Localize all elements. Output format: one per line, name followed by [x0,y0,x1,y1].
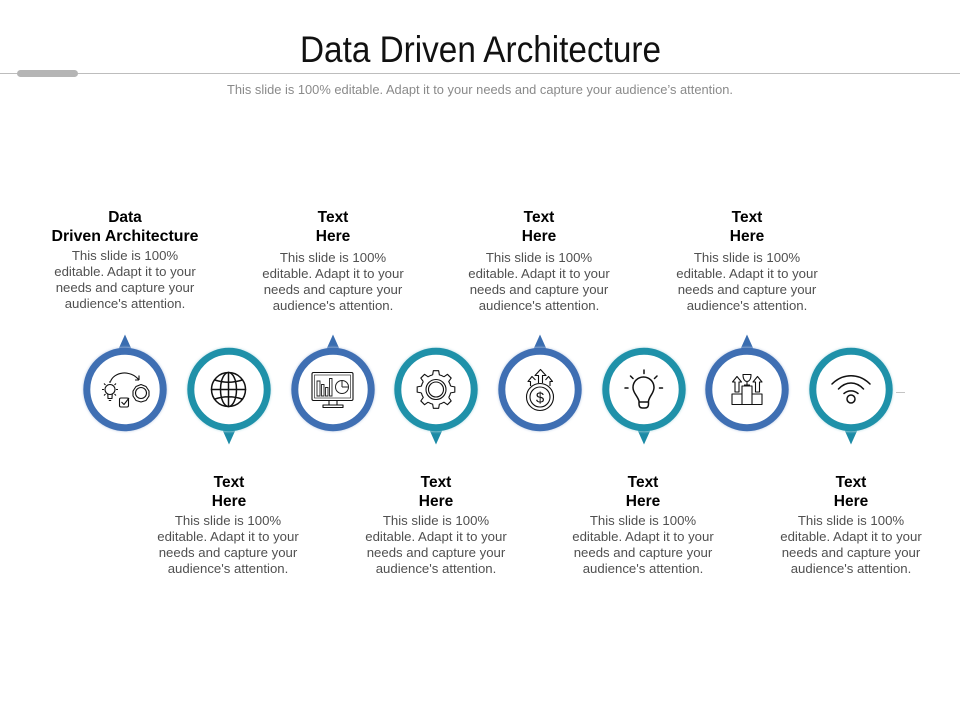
text block 2: needs and capture your [159,545,298,560]
text block 8: editable. Adapt it to your [780,529,922,544]
node 1: blue ring [83,334,167,432]
text block 3: Text [318,209,348,226]
text block 2: Text [214,474,244,491]
text block 3 [262,209,404,313]
icon: light bulb [625,370,662,408]
icon: wifi [832,376,870,403]
text block 7 [676,209,818,313]
text block 1: Data [108,209,142,226]
text block 1: needs and capture your [56,280,195,295]
text block 5: audience's attention. [479,298,599,313]
text block 5: Here [522,228,557,245]
icon: gear [417,371,455,408]
icon: globe [212,372,246,406]
text block 1: editable. Adapt it to your [54,264,196,279]
text block 3: editable. Adapt it to your [262,266,404,281]
text block 4: Here [419,493,454,510]
text block 8: needs and capture your [782,545,921,560]
text block 5: needs and capture your [470,282,609,297]
title: Data Driven Architecture [300,29,661,70]
text block 3: Here [316,228,351,245]
text block 6: needs and capture your [574,545,713,560]
text block 5 [468,209,610,313]
text block 4: This slide is 100% [383,513,489,528]
node 5: blue ring [498,334,582,432]
text block 2: This slide is 100% [175,513,281,528]
text block 4: needs and capture your [367,545,506,560]
text block 2 [157,474,299,576]
text block 6: editable. Adapt it to your [572,529,714,544]
node 7: blue ring [705,334,789,432]
text block 6: This slide is 100% [590,513,696,528]
node 8: teal ring [809,348,893,444]
text block 8: Here [834,493,869,510]
text block 4: editable. Adapt it to your [365,529,507,544]
text block 7: This slide is 100% [694,250,800,265]
text block 1: This slide is 100% [72,248,178,263]
text block 3: This slide is 100% [280,250,386,265]
node 3: blue ring [291,334,375,432]
header rule [0,70,960,77]
text block 5: editable. Adapt it to your [468,266,610,281]
text block 7: needs and capture your [678,282,817,297]
text block 3: needs and capture your [264,282,403,297]
text block 5: Text [524,209,554,226]
node 2: teal ring [187,348,271,444]
text block 5: This slide is 100% [486,250,592,265]
text block 7: Text [732,209,762,226]
text block 1 [52,209,199,311]
text block 4: Text [421,474,451,491]
text block 2: editable. Adapt it to your [157,529,299,544]
text block 1: Driven Architecture [52,228,199,245]
icon: monitor with charts [312,372,353,408]
text block 4 [365,474,507,576]
node 4: teal ring [394,348,478,444]
icon: podium with trophy [732,374,762,404]
text block 1: audience's attention. [65,296,185,311]
text block 6: Here [626,493,661,510]
text block 6 [572,474,714,576]
text block 3: audience's attention. [273,298,393,313]
text block 8: This slide is 100% [798,513,904,528]
text block 7: audience's attention. [687,298,807,313]
text block 2: audience's attention. [168,561,288,576]
node 6: teal ring [602,348,686,444]
text block 7: Here [730,228,765,245]
text block 8: audience's attention. [791,561,911,576]
text block 6: Text [628,474,658,491]
text block 6: audience's attention. [583,561,703,576]
text block 2: Here [212,493,247,510]
icon: idea to gear process [102,373,149,407]
text block 8 [780,474,922,576]
text block 8: Text [836,474,866,491]
text block 4: audience's attention. [376,561,496,576]
small tick at end of row [896,392,905,393]
text block 7: editable. Adapt it to your [676,266,818,281]
icon: money growth: $ [536,390,545,406]
subtitle: This slide is 100% editable. Adapt it to your needs and capture your audience’s attention. [227,82,733,97]
